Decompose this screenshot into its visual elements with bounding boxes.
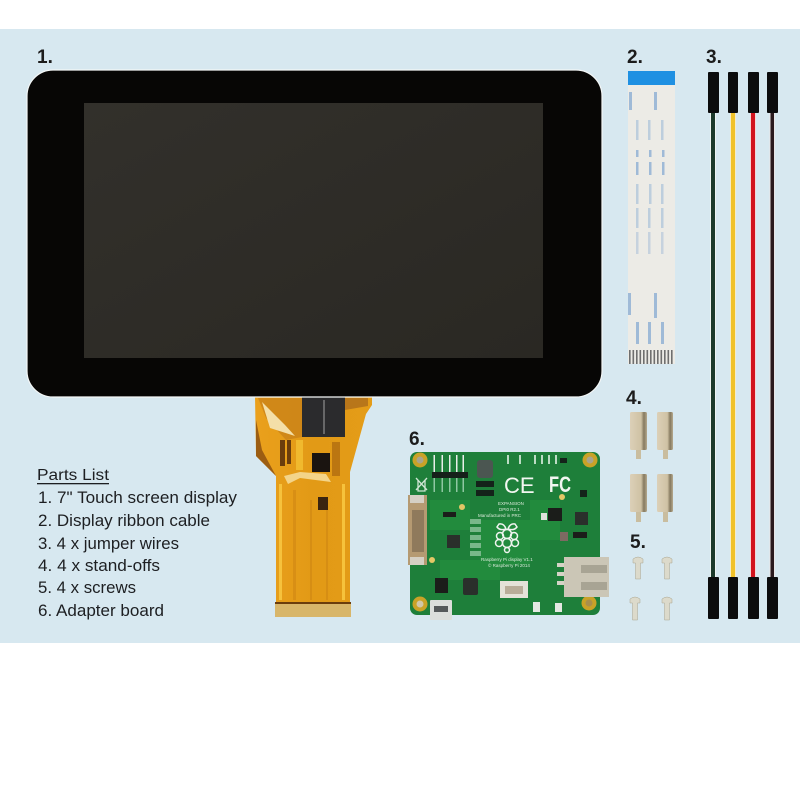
item 6: 6. Adapter board — [38, 601, 164, 620]
inductor — [477, 460, 493, 478]
pin header — [432, 455, 468, 492]
ribbon blue tab — [628, 71, 675, 85]
top small parts — [507, 455, 557, 464]
raspberry logo — [496, 524, 518, 552]
FPC connector — [500, 581, 528, 598]
flex connector end — [275, 603, 351, 617]
micro USB port — [430, 600, 452, 620]
label 2: 2. — [627, 47, 643, 68]
jumper wires — [708, 72, 778, 619]
pad column — [470, 519, 481, 556]
item 4: 4. 4 x stand-offs — [38, 556, 160, 575]
screen area — [84, 103, 543, 358]
flex chip — [312, 453, 330, 472]
black tape — [302, 397, 345, 437]
wire yellow — [728, 72, 738, 619]
adapter board: Manufactured in PRC — [478, 513, 522, 518]
item 5: 5. 4 x screws — [38, 578, 136, 597]
adapter board: DPI0 R2.1 — [499, 507, 520, 512]
CE mark: CE — [504, 473, 535, 498]
label 4: 4. — [626, 388, 642, 409]
USB type-A port — [557, 557, 609, 597]
display connector — [408, 495, 427, 565]
board small text: EXPANSION — [498, 501, 524, 506]
stand-offs — [630, 412, 673, 522]
adapter board: © Raspberry Pi 2014 — [488, 562, 530, 568]
ribbon contacts — [629, 350, 673, 364]
parts list heading: Parts List — [37, 467, 110, 484]
screws — [630, 557, 672, 620]
label 5: 5. — [630, 532, 646, 553]
flex cable of display — [255, 396, 372, 617]
item 3: 3. 4 x jumper wires — [38, 534, 179, 553]
chips — [435, 508, 588, 595]
waste bin mark — [416, 478, 427, 491]
tactile part — [560, 532, 568, 541]
adapter board: Raspberry Pi display V1.1 — [481, 557, 533, 562]
wire red — [748, 72, 759, 619]
wire green-black — [708, 72, 719, 619]
small pads — [533, 602, 540, 612]
label 1: 1. — [37, 47, 53, 68]
label 3: 3. — [706, 47, 722, 68]
wire black — [767, 72, 778, 619]
display panel — [27, 70, 602, 397]
background panel — [0, 29, 800, 643]
item 2: 2. Display ribbon cable — [38, 511, 210, 530]
board traces — [430, 500, 560, 580]
label 6: 6. — [409, 429, 425, 450]
FC mark: FC — [549, 472, 571, 497]
mounting holes — [412, 452, 598, 612]
adapter board — [408, 452, 609, 620]
parts list — [37, 467, 237, 620]
item 1: 1. 7" Touch screen display — [38, 488, 237, 507]
ribbon cable — [628, 71, 675, 364]
flex component — [318, 497, 328, 510]
